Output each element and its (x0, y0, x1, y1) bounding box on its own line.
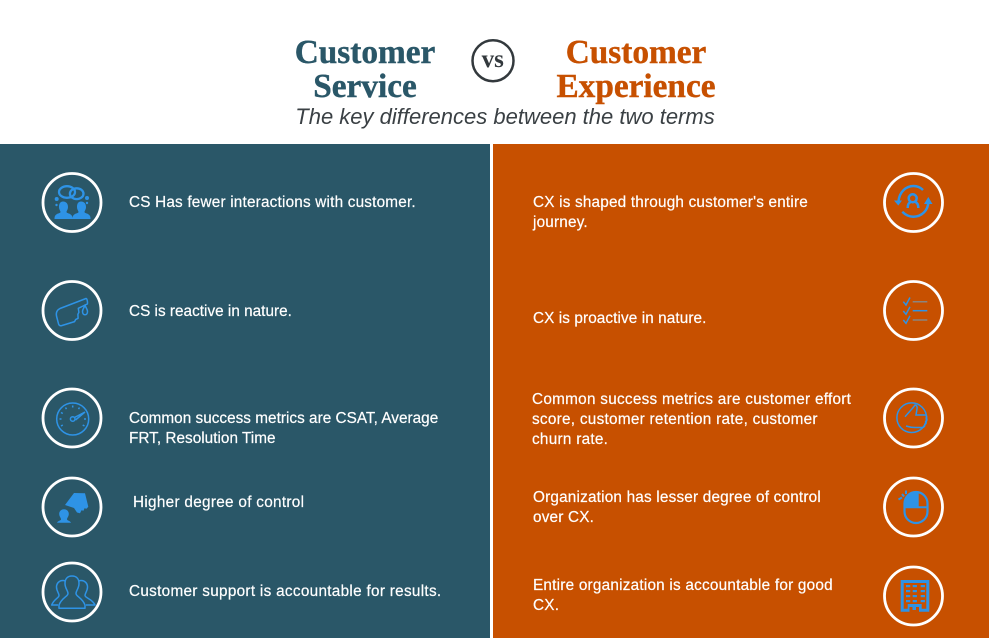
icon: thumbs up (883, 388, 944, 448)
text: CX metrics: churn rate. (532, 431, 608, 448)
text: lesser control (533, 489, 821, 526)
title: customer experience (556, 34, 716, 105)
icon: hand over person (42, 476, 102, 538)
text: support accountable: Customer support is accountable for results. (129, 583, 441, 600)
text: proactive: CX is proactive in nature. (533, 310, 706, 327)
panel: customer experience (493, 144, 989, 638)
text: CX metrics: Common success metrics are customer effort (532, 391, 851, 408)
panel: customer service (0, 144, 490, 638)
text: lesser control: over CX. (533, 509, 594, 526)
icon: checklist (883, 280, 944, 341)
title: customer service: Customer (295, 34, 435, 71)
icon: mouse (883, 476, 944, 538)
subtitle: The key differences between the two terms (295, 104, 715, 129)
text: organization accountable: Entire organization is accountable for good (533, 577, 833, 594)
text: entire journey (532, 194, 808, 231)
vs badge (471, 39, 515, 82)
text: organization accountable: CX. (533, 597, 559, 614)
icon: customer journey cycle (883, 172, 944, 233)
icon: group of people (42, 562, 102, 622)
text: organization accountable (533, 577, 833, 614)
text: CS metrics (129, 410, 438, 447)
icon: people talking (42, 172, 102, 233)
title: customer service: Service (313, 68, 417, 105)
title: customer service (295, 34, 435, 105)
text: CX metrics: score, customer retention rate, customer (532, 411, 818, 428)
title: customer experience: Experience (556, 68, 716, 105)
text: fewer interactions: CS Has fewer interactions with customer. (129, 194, 416, 211)
text: CS metrics: Common success metrics are CSAT, Average (129, 410, 438, 427)
title: customer experience: Customer (566, 34, 706, 71)
text: reactive: CS is reactive in nature. (129, 303, 292, 320)
text: higher control: Higher degree of control (133, 494, 304, 511)
text: lesser control: Organization has lesser degree of control (533, 489, 821, 506)
text: entire journey: journey. (533, 214, 588, 231)
icon: speedometer (42, 388, 102, 448)
text: CS metrics: FRT, Resolution Time (129, 430, 276, 447)
text: entire journey: CX is shaped through customer's entire (533, 194, 808, 211)
icon: pointing hand (42, 280, 102, 341)
icon: office building (883, 566, 944, 626)
vs badge: vs (482, 46, 504, 73)
text: CX metrics (532, 391, 851, 448)
